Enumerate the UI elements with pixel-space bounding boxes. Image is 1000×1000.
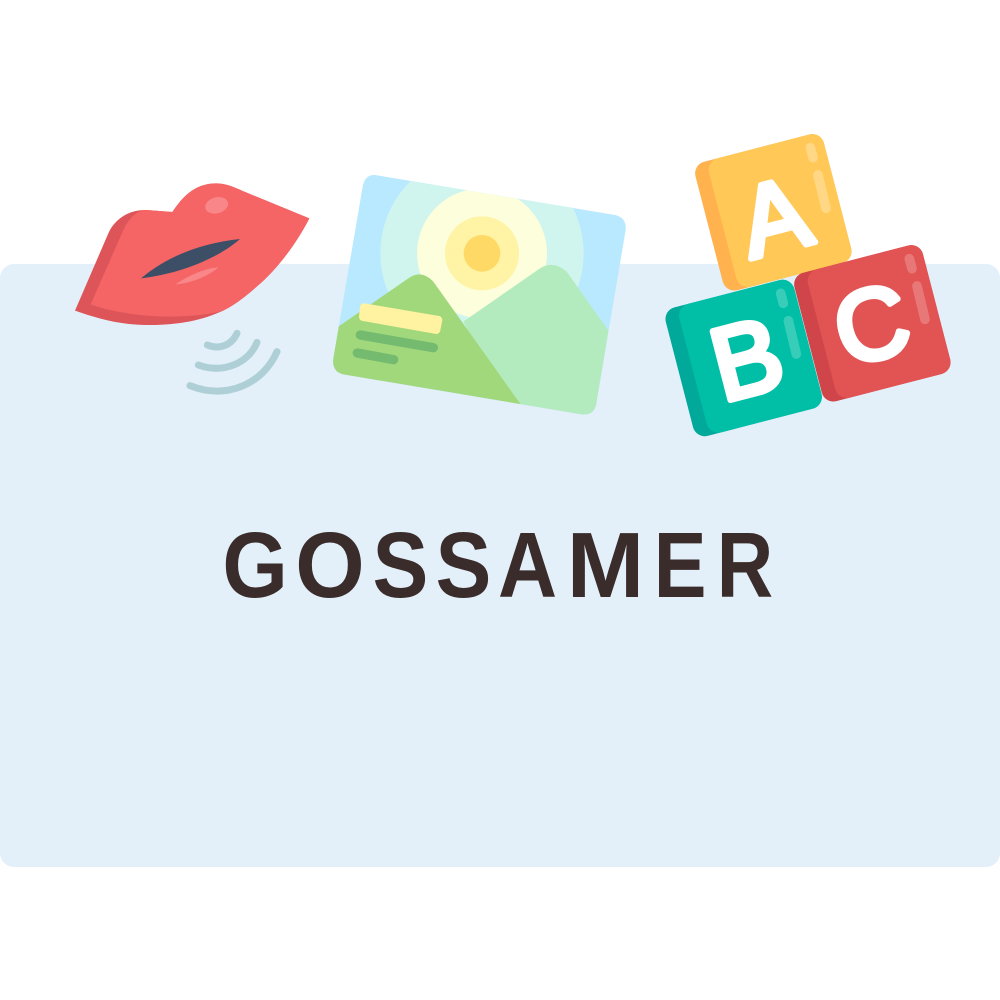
- caption yellow bar: [363, 307, 438, 330]
- dark green mountain: [330, 274, 521, 404]
- icon: ABC blocks: [663, 132, 953, 439]
- title: E: [654, 514, 706, 617]
- title: S: [436, 513, 491, 617]
- block B: B: [699, 294, 794, 423]
- title: M: [567, 513, 644, 617]
- light green mountain: [463, 265, 608, 418]
- icon: landscape picture: [333, 175, 626, 414]
- icon: lips with sound waves: [75, 183, 309, 391]
- title: S: [372, 513, 428, 617]
- caption line one: [360, 335, 433, 348]
- lip highlight: [203, 195, 230, 216]
- infographic canvas: [0, 134, 1000, 867]
- sound waves: [190, 333, 277, 391]
- caption line two: [357, 353, 394, 360]
- title: A: [498, 513, 557, 617]
- block C: [792, 243, 953, 404]
- block A: A: [728, 155, 821, 280]
- block C: C: [823, 262, 921, 388]
- block B: [663, 277, 824, 439]
- picture sky and sun: [333, 175, 626, 414]
- block A: [693, 132, 854, 293]
- mouth opening: [141, 239, 240, 278]
- lower lip gloss: [176, 267, 218, 284]
- title: G: [222, 513, 288, 617]
- title: R: [717, 514, 773, 618]
- title: O: [295, 513, 365, 617]
- panel: background card: [0, 264, 1000, 867]
- lips main shape: [91, 183, 309, 317]
- title: [222, 513, 773, 618]
- lips shadow shape: [75, 183, 309, 325]
